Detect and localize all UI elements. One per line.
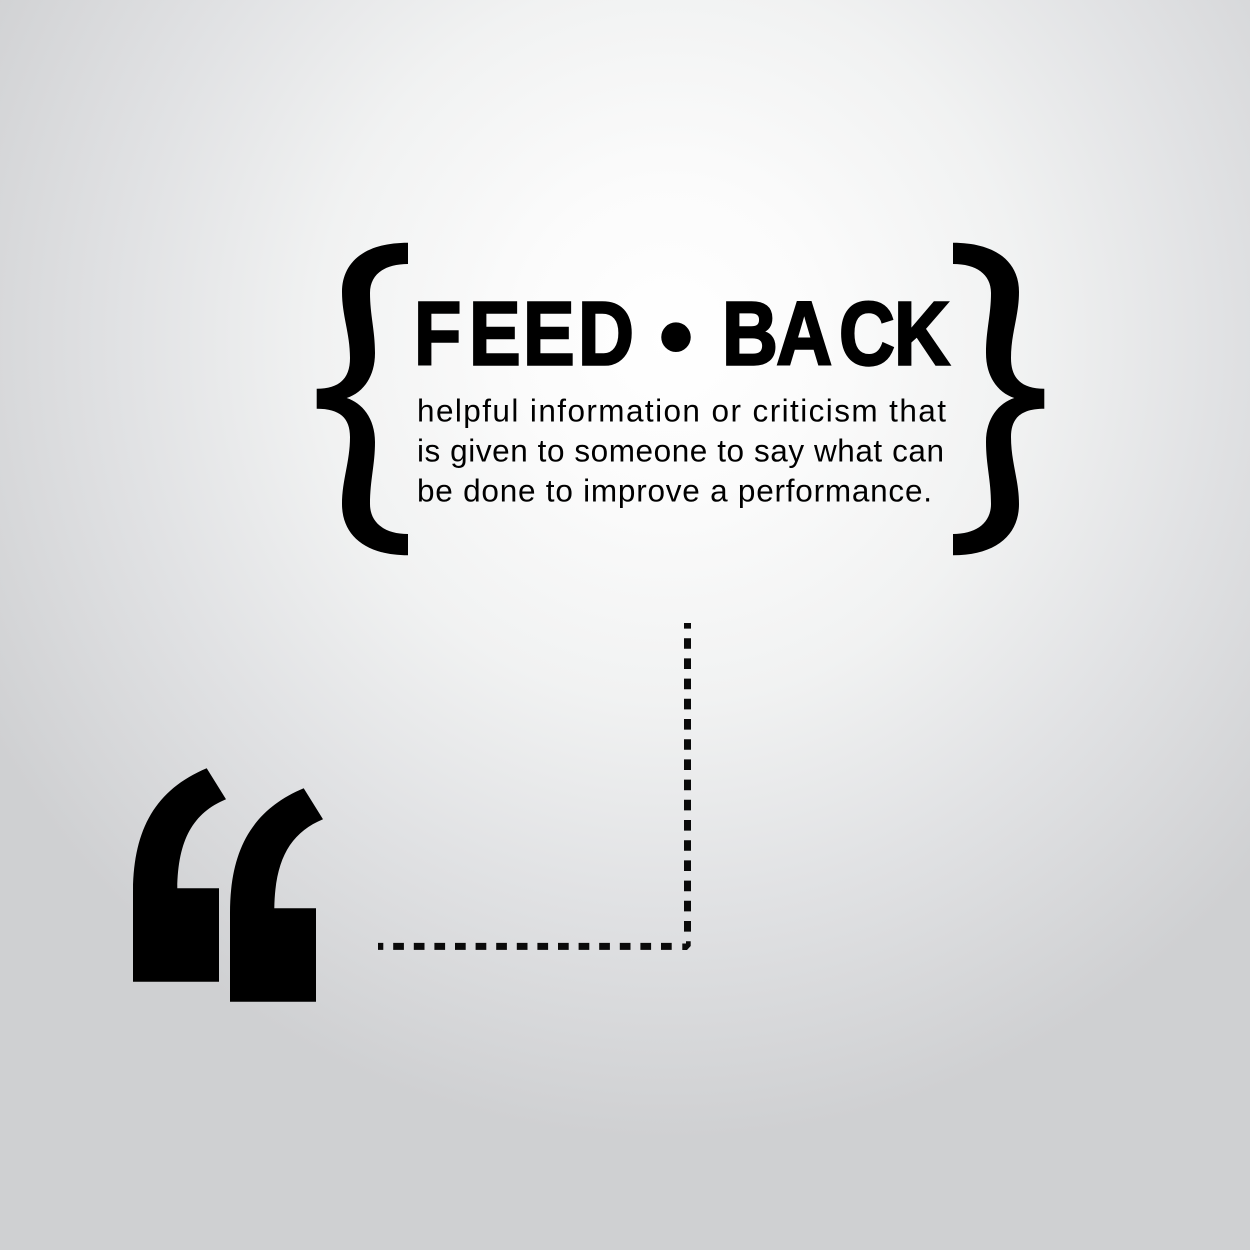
icon: right curly brace [953,243,1044,555]
icon: left curly brace [317,243,408,555]
title [414,278,950,393]
definition text: helpful information or criticism that [417,393,946,429]
dotted connector arrow line [378,623,691,950]
definition text [417,393,946,509]
title: BACK [722,283,950,384]
definition text: be done to improve a performance. [417,473,932,509]
icon: opening quotation mark [133,768,323,1002]
title: FEED [414,283,634,384]
definition text: is given to someone to say what can [417,433,944,469]
title: • [658,278,694,393]
